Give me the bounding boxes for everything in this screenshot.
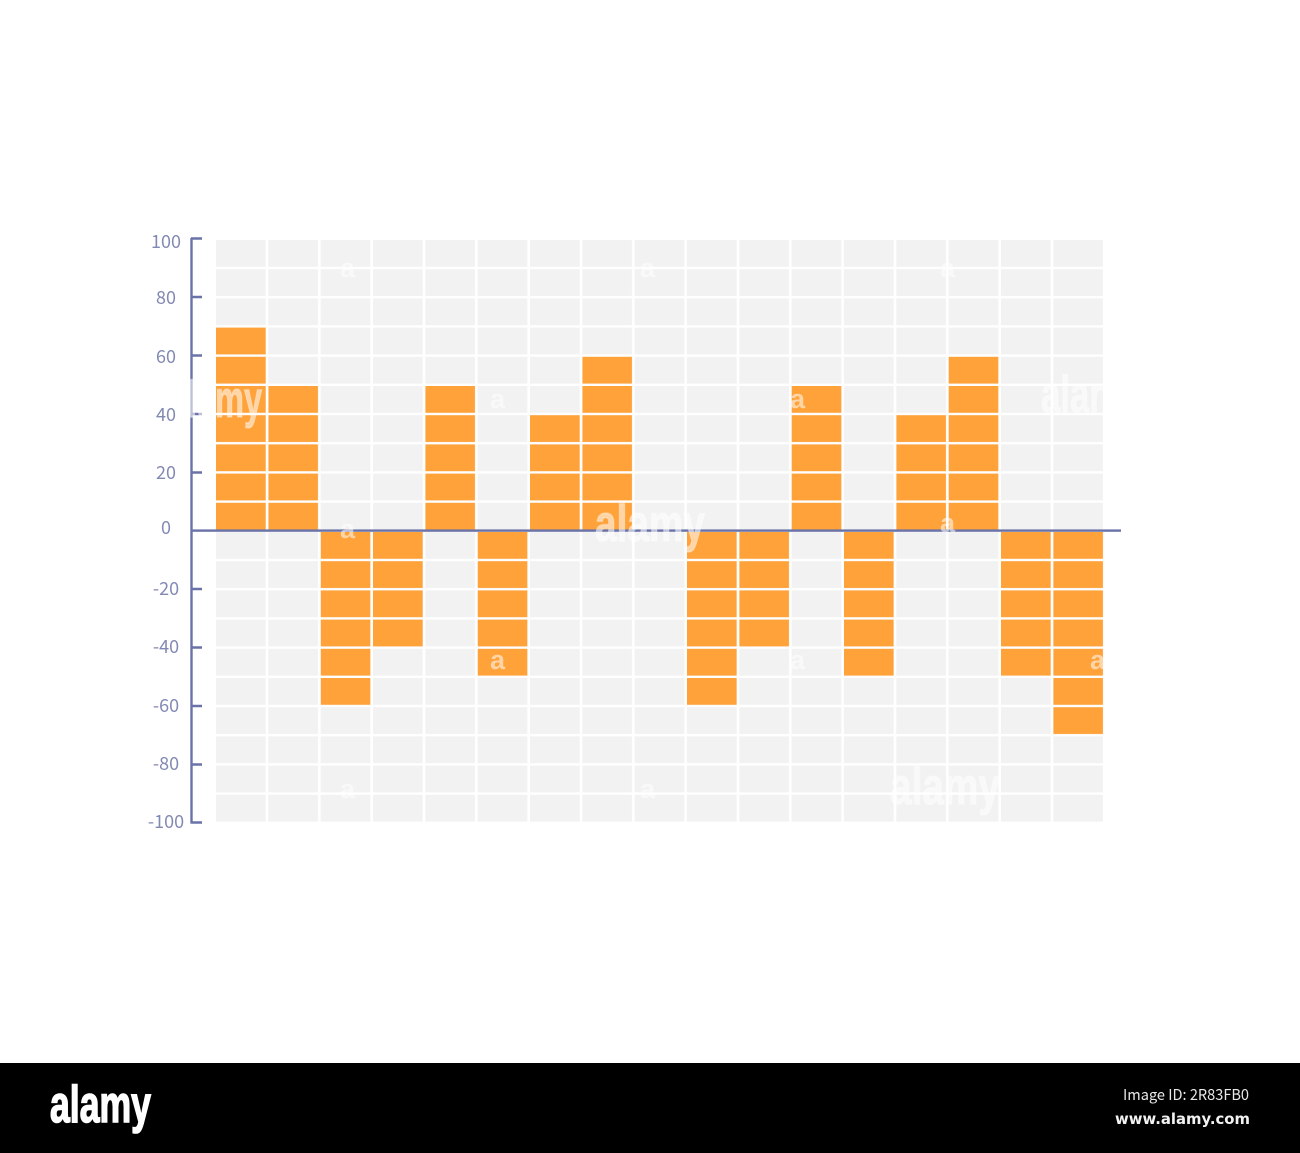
y axis labels: 60	[156, 343, 176, 369]
watermarks: a	[940, 253, 956, 283]
watermarks: a	[490, 384, 506, 414]
watermarks: a	[340, 774, 356, 804]
y axis labels: 80	[156, 284, 176, 310]
y axis labels: -60	[153, 692, 179, 718]
y axis labels: 20	[156, 459, 176, 485]
grid background	[216, 240, 1103, 822]
footer bar	[0, 1063, 1300, 1153]
y axis labels: 100	[151, 228, 181, 254]
footer logo: alamy	[50, 1076, 151, 1134]
watermarks: a	[340, 514, 356, 544]
watermarks: a	[640, 253, 656, 283]
watermarks: alamy	[890, 758, 1000, 816]
zero baseline	[191, 529, 1121, 532]
watermarks	[188, 253, 1106, 816]
watermarks: a	[640, 774, 656, 804]
y axis	[191, 238, 202, 824]
watermarks: a	[1090, 645, 1106, 675]
y axis labels: 0	[161, 514, 171, 540]
watermarks: a	[940, 508, 956, 538]
website: www.alamy.com	[1115, 1110, 1250, 1128]
watermarks: alar	[1041, 366, 1103, 424]
watermarks: a	[340, 253, 356, 283]
y axis labels: 40	[156, 401, 176, 427]
y axis labels: -100	[148, 808, 184, 834]
y axis labels: -40	[153, 633, 179, 659]
image id: Image ID: 2R83FB0	[1123, 1084, 1249, 1105]
watermarks: a	[790, 384, 806, 414]
bars	[216, 327, 1103, 735]
watermarks: a	[490, 645, 506, 675]
watermarks: a	[790, 645, 806, 675]
y axis labels: -20	[153, 575, 179, 601]
y axis labels	[148, 228, 184, 834]
y axis labels: -80	[153, 750, 179, 776]
watermarks: lamy	[188, 371, 262, 429]
watermarks: alamy	[595, 495, 705, 553]
